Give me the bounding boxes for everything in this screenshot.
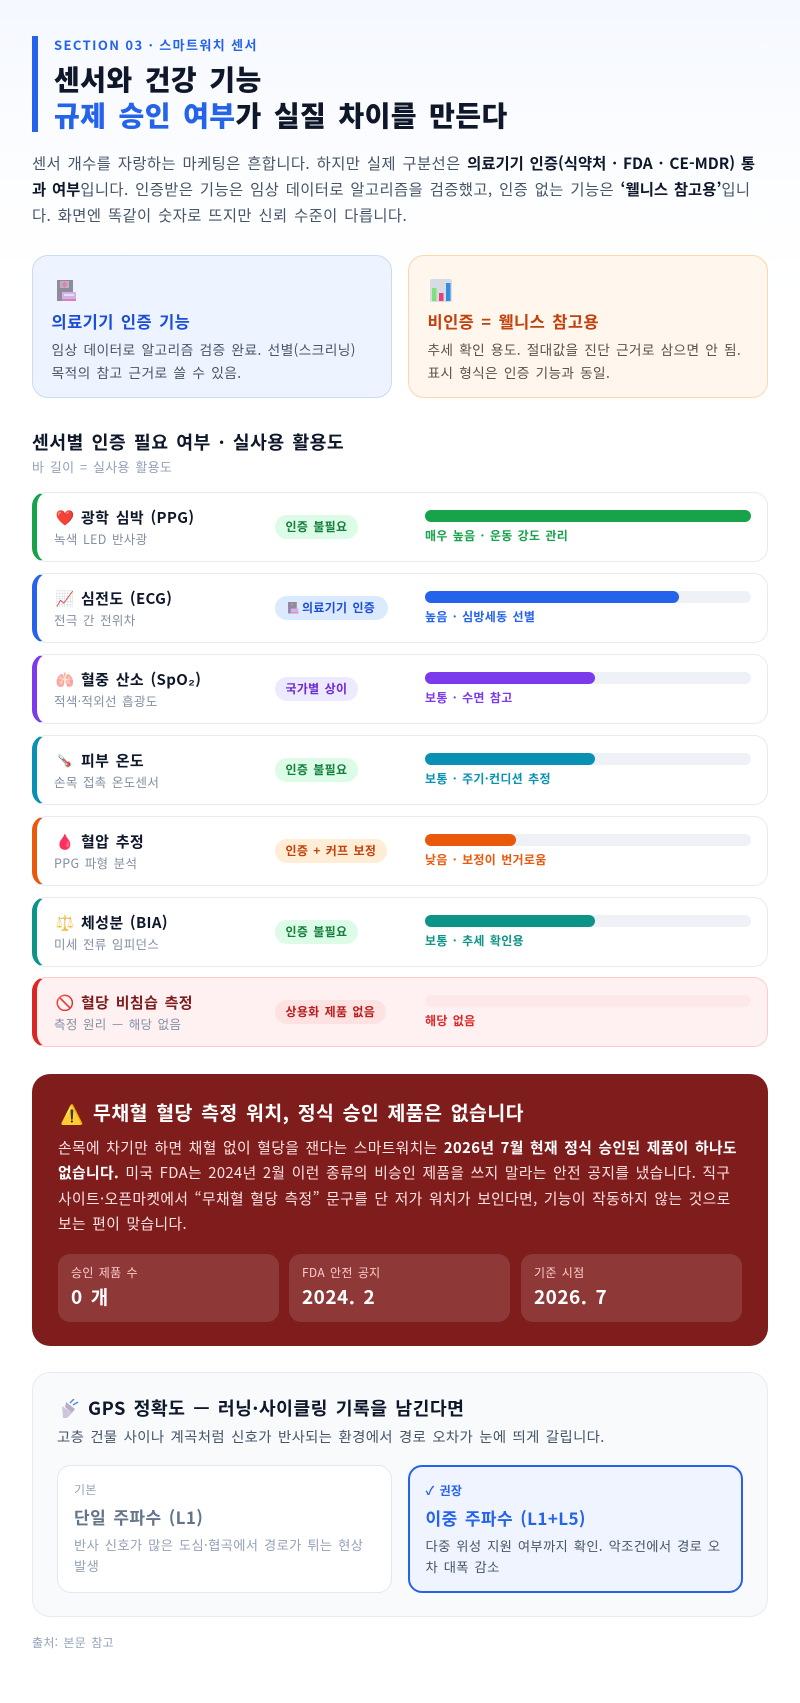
card text: 추세 확인 용도. 절대값을 진단 근거로 삼으면 안 됨. [428, 339, 741, 359]
badge [275, 758, 358, 782]
GPS note: 고층 건물 사이나 계곡처럼 신호가 반사되는 환경에서 경로 오차가 눈에 띄게 갈립니다. [57, 1426, 605, 1447]
GPS heading: GPS 정확도 — 러닝·사이클링 기록을 남긴다면 [88, 1395, 464, 1421]
option: L1+L5 recommended [408, 1465, 743, 1593]
stat: reference date [521, 1254, 742, 1322]
icon: hospital [57, 280, 76, 301]
card heading: 의료기기 인증 기능 [52, 309, 190, 333]
option: L1 [57, 1465, 392, 1593]
header block [32, 36, 768, 132]
stat value: 0 개 [71, 1283, 109, 1310]
sensor method: 적색·적외선 흡광도 [54, 691, 158, 710]
card text: 표시 형식은 인증 기능과 동일. [428, 362, 610, 382]
sensor method: 미세 전류 임피던스 [54, 934, 159, 953]
sensor name: 피부 온도 [81, 750, 144, 770]
usage label: 보통 · 수면 참고 [425, 689, 513, 706]
option text: 발생 [74, 1556, 99, 1575]
option tag: ✓ 권장 [426, 1482, 462, 1499]
stat label: 승인 제품 수 [71, 1264, 138, 1281]
usage bar [425, 995, 751, 1007]
badge: 의료기기 인증 [302, 599, 375, 616]
icon: bar chart [430, 279, 452, 302]
usage label: 보통 · 주기·컨디션 추정 [425, 770, 551, 787]
option tag: 기본 [74, 1481, 97, 1498]
option text [426, 1536, 720, 1576]
card text: 임상 데이터로 알고리즘 검증 완료. 선별(스크리닝) [52, 339, 356, 359]
usage bar [425, 591, 751, 603]
row: non-invasive glucose [32, 977, 768, 1047]
sensor name: 혈압 추정 [81, 830, 144, 852]
sensor name: 체성분 (BIA) [81, 912, 168, 932]
usage bar [425, 510, 751, 522]
option name: 단일 주파수 (L1) [74, 1504, 203, 1529]
option name: 이중 주파수 (L1+L5) [426, 1505, 586, 1530]
icon: lungs: 🫁 [55, 669, 75, 690]
section kicker: SECTION 03 · 스마트워치 센서 [54, 35, 258, 54]
usage bar [425, 834, 751, 846]
row: body composition [32, 897, 768, 967]
stat: approved products [58, 1254, 279, 1322]
panel: non-certified features [408, 255, 768, 398]
stat label: 기준 시점 [534, 1264, 584, 1281]
icon: thermometer: 🌡️ [50, 746, 79, 775]
row: PPG [32, 492, 768, 562]
sensor method: 녹색 LED 반사광 [54, 529, 147, 548]
stat value: 2024. 2 [302, 1283, 375, 1310]
sensor name: 심전도 (ECG) [81, 588, 172, 608]
badge: 인증 불필요 [286, 518, 347, 535]
row: ECG [32, 573, 768, 643]
card text [428, 339, 741, 382]
intro paragraph: 센서 개수를 자랑하는 마케팅은 흔합니다. 하지만 실제 구분선은 의료기기 인증(식약처 · FDA · CE-MDR) 통과 여부입니다. 인증받은 기능은 임상 데이터로 알고리즘을 검증했고, 인증 없는 기능은 ‘웰니스 참고용’입니다. 화면엔 똑같이 숫자로 뜨지만 신뢰 수준이 다릅니다. [32, 152, 755, 226]
sensor method: 손목 접촉 온도센서 [54, 772, 159, 791]
badge [275, 1000, 386, 1024]
sensor method: PPG 파형 분석 [54, 853, 137, 872]
icon: satellite [62, 1399, 78, 1418]
row: blood pressure [32, 816, 768, 886]
panel: GPS accuracy [32, 1372, 768, 1617]
row: skin temperature [32, 735, 768, 805]
badge: 국가별 상이 [286, 680, 347, 697]
sensor list heading: 센서별 인증 필요 여부 · 실사용 활용도 [32, 429, 344, 455]
badge [275, 677, 358, 701]
option text: 다중 위성 지원 여부까지 확인. 악조건에서 경로 오 [426, 1536, 720, 1555]
warning text: 손목에 차기만 하면 채혈 없이 혈당을 잰다는 스마트워치는 2026년 7월 현재 정식 승인된 제품이 하나도 없습니다. 미국 FDA는 2024년 2월 이런 종류의 비승인 제품을 쓰지 말라는 안전 공지를 냈습니다. 직구 사이트·오픈마켓에서 “무채혈 혈당 측정” 문구를 단 저가 워치가 보인다면, 기능이 작동하지 않는 것으로 보는 편이 맞습니다. [58, 1137, 737, 1234]
badge [275, 839, 387, 863]
usage label: 매우 높음 · 운동 강도 관리 [425, 527, 568, 544]
option text: 반사 신호가 많은 도심·협곡에서 경로가 튀는 현상 [74, 1535, 363, 1554]
badge: 인증 + 커프 보정 [286, 842, 376, 859]
icon: warning: ⚠️ [60, 1100, 84, 1127]
usage bar [425, 753, 751, 765]
usage label: 보통 · 추세 확인용 [425, 932, 524, 949]
sensor method: 측정 원리 — 해당 없음 [54, 1014, 181, 1033]
sensor name: 혈당 비침습 측정 [81, 992, 193, 1012]
stat: FDA notice [289, 1254, 510, 1322]
panel: glucose warning [32, 1074, 768, 1346]
option text [74, 1535, 363, 1575]
sensor name: 광학 심박 (PPG) [81, 506, 194, 528]
option text: 차 대폭 감소 [426, 1557, 500, 1576]
badge [275, 515, 358, 539]
icon: chart: 📈 [55, 588, 75, 609]
row: SpO2 [32, 654, 768, 724]
badge: 인증 불필요 [286, 923, 347, 940]
title: 센서와 건강 기능 [54, 59, 262, 99]
usage label: 높음 · 심방세동 선별 [425, 608, 535, 625]
icon: blood drop: 🩸 [55, 831, 75, 852]
badge: 인증 불필요 [286, 761, 347, 778]
usage bar [425, 672, 751, 684]
stat label: FDA 안전 공지 [302, 1264, 381, 1281]
sensor method: 전극 간 전위차 [54, 610, 136, 629]
card text [52, 339, 356, 382]
card text: 목적의 참고 근거로 쓸 수 있음. [52, 362, 241, 382]
badge [275, 596, 388, 620]
sensor name: 혈중 산소 (SpO₂) [81, 668, 201, 690]
usage label: 해당 없음 [425, 1012, 475, 1029]
source note: 출처: 본문 참고 [32, 1634, 114, 1651]
icon: heart: ❤️ [55, 507, 75, 528]
warning heading: 무채혈 혈당 측정 워치, 정식 승인 제품은 없습니다 [93, 1097, 524, 1126]
card heading: 비인증 = 웰니스 참고용 [428, 309, 599, 333]
usage bar [425, 915, 751, 927]
sensor list note: 바 길이 = 실사용 활용도 [32, 457, 172, 476]
usage label: 낮음 · 보정이 번거로움 [425, 851, 547, 868]
badge [275, 920, 358, 944]
stat value: 2026. 7 [534, 1283, 607, 1310]
icon: prohibited: 🚫 [55, 992, 75, 1013]
badge: 상용화 제품 없음 [286, 1003, 375, 1020]
title: 규제 승인 여부가 실질 차이를 만든다 [54, 95, 508, 135]
icon: scale: ⚖️ [55, 912, 75, 933]
title [54, 59, 508, 135]
panel: certified features [32, 255, 392, 398]
